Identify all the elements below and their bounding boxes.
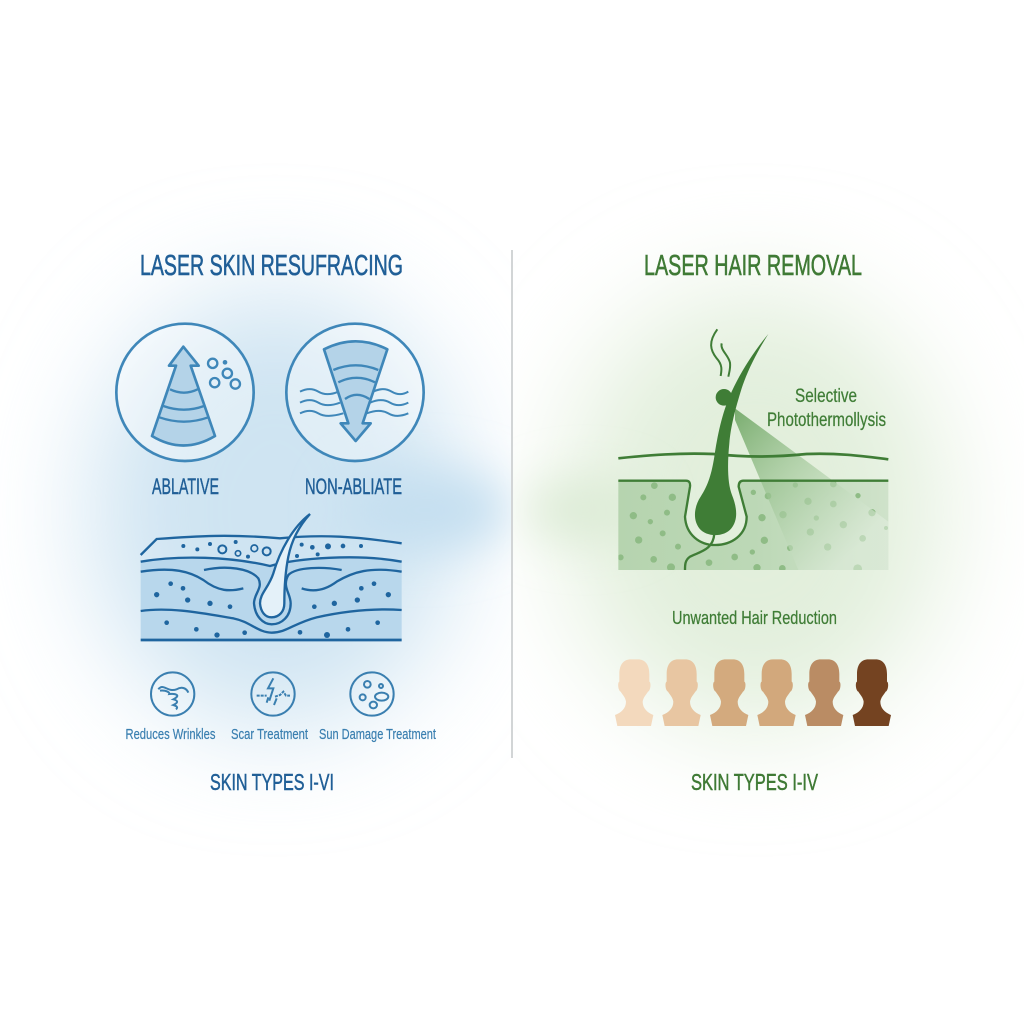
center divider (511, 250, 513, 758)
skin cross-section diagram (141, 514, 402, 640)
label: reduces wrinkles: Reduces Wrinkles (126, 726, 216, 743)
skin tone head silhouettes (615, 659, 891, 726)
heading: laser hair removal: LASER HAIR REMOVAL (644, 250, 862, 282)
icon: reduces wrinkles (151, 672, 194, 716)
panel: laser hair removal (615, 250, 891, 795)
icon: non-ablative (286, 324, 424, 461)
label: skin types I-IV: SKIN TYPES I-IV (691, 769, 818, 795)
panel: laser skin resurfacing (116, 250, 437, 795)
steam (711, 329, 730, 377)
icon: scar treatment (251, 672, 295, 716)
background glow: green (525, 290, 945, 730)
label: ablative: ABLATIVE (152, 474, 219, 499)
icon: sun damage treatment (350, 672, 394, 716)
label: unwanted hair reduction: Unwanted Hair Reduction (672, 608, 837, 628)
heading: laser skin resurfacing: LASER SKIN RESUFRACING (140, 250, 403, 282)
hair shaft (695, 334, 768, 535)
label: selective photothermolysis (767, 386, 886, 431)
label: scar treatment: Scar Treatment (231, 726, 309, 743)
background glow: blue (90, 290, 510, 730)
label: non-ablative: NON-ABLIATE (305, 474, 402, 499)
icon: ablative (116, 324, 254, 461)
hair follicle diagram (618, 329, 888, 573)
label: skin types I-VI: SKIN TYPES I-VI (210, 769, 334, 795)
label: selective photothermolysis: Selective (795, 386, 857, 407)
label: selective photothermolysis: Photothermollysis (767, 410, 886, 431)
label: sun damage treatment: Sun Damage Treatment (319, 726, 437, 743)
light beam (735, 408, 888, 570)
